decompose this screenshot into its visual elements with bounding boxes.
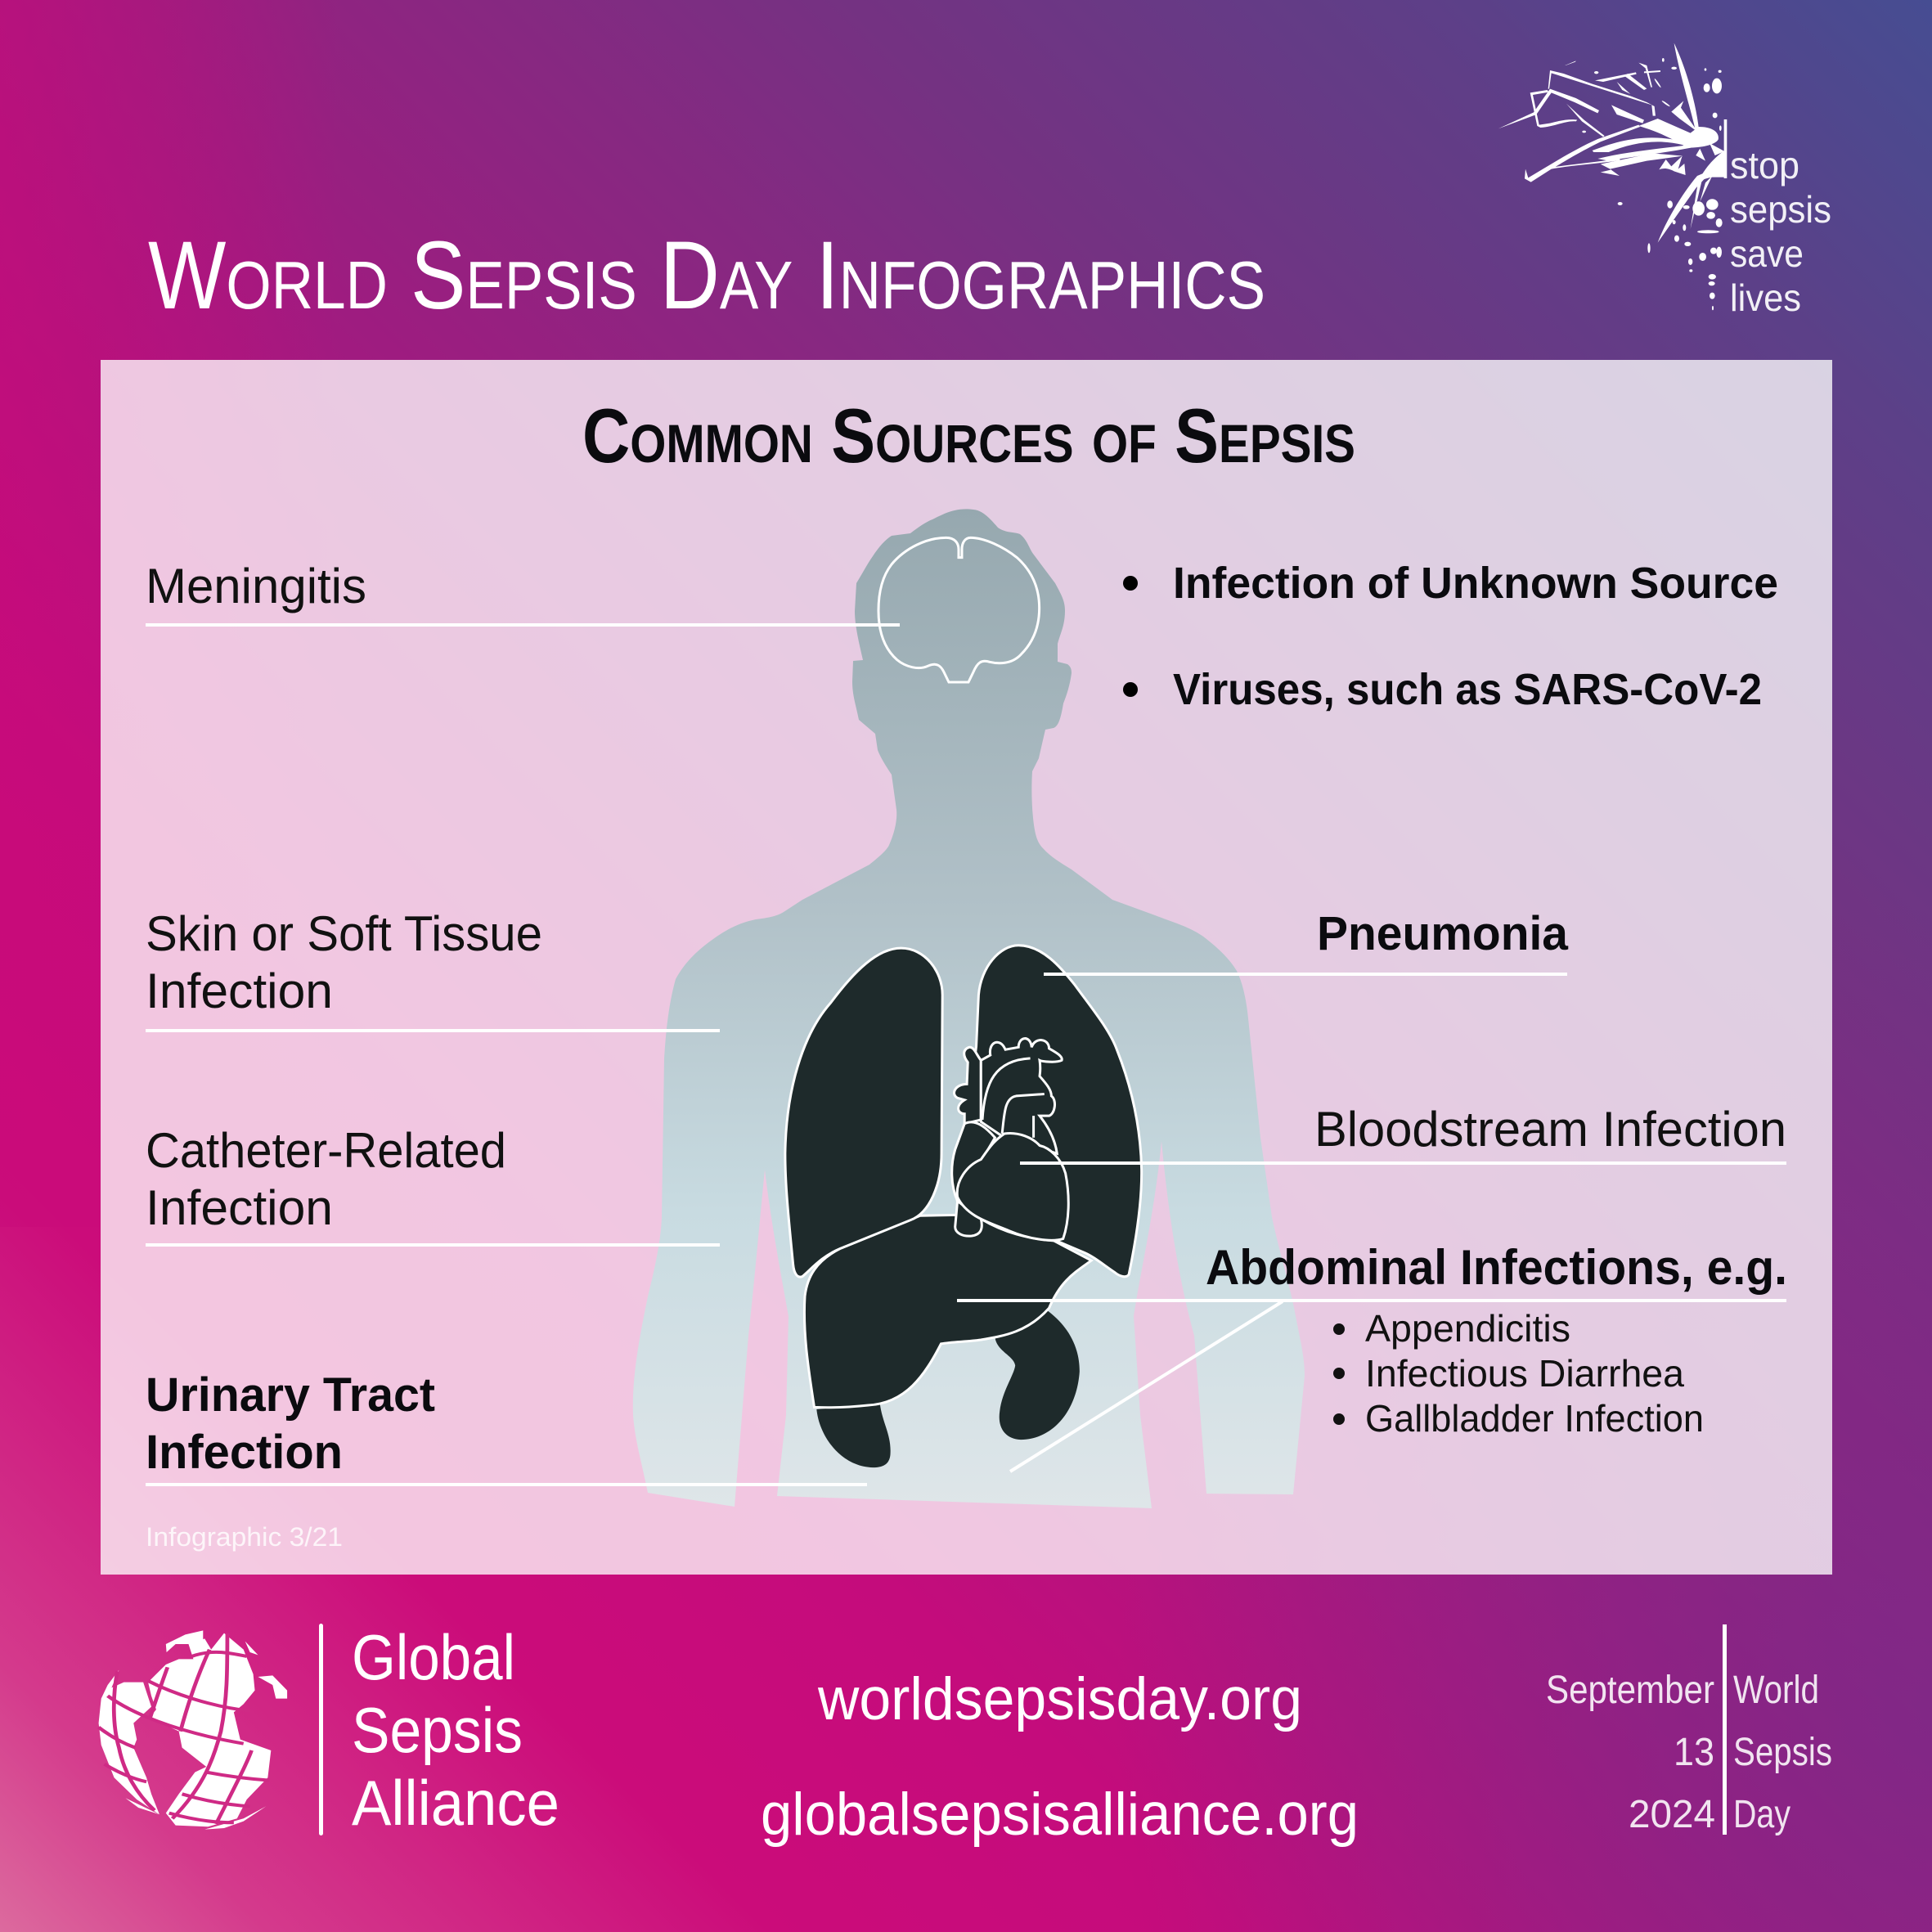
organ: right lung <box>785 948 942 1277</box>
human silhouette <box>633 509 1305 1508</box>
leader line: urinary <box>146 1483 867 1486</box>
logo text: Global <box>352 1621 515 1693</box>
organ: left lung <box>958 946 1142 1277</box>
logo text: Sepsis <box>352 1694 523 1766</box>
panel background <box>101 360 1832 1575</box>
panel heading: Common Sources of Sepsis <box>582 393 1355 479</box>
label: skin or soft tissue infection: Skin or Soft Tissue <box>146 906 542 961</box>
label: bloodstream infection: Bloodstream Infection <box>1314 1102 1786 1157</box>
leader line: bloodstream <box>1020 1161 1786 1165</box>
date block: 2024 <box>1629 1793 1715 1836</box>
website links <box>761 1666 1359 1848</box>
organs <box>785 946 1142 1467</box>
label: urinary tract infection: Urinary Tract <box>146 1368 435 1422</box>
organ: liver <box>804 1215 1091 1408</box>
label: urinary tract infection <box>146 1368 435 1479</box>
bullet <box>1123 576 1138 591</box>
list: abdominal examples: Infectious Diarrhea <box>1365 1352 1684 1395</box>
logo text: lives: lives <box>1730 276 1801 319</box>
leader line: catheter <box>146 1243 720 1247</box>
date block: September <box>1546 1669 1714 1712</box>
label: abdominal infections: Abdominal Infections, e.g. <box>1206 1240 1787 1295</box>
website links: worldsepsisday.org <box>817 1666 1302 1732</box>
organ: stomach <box>995 1310 1080 1440</box>
label: viruses: Viruses, such as SARS-CoV-2 <box>1173 665 1762 714</box>
label: urinary tract infection: Infection <box>146 1426 343 1479</box>
icon: brain outline <box>878 537 1040 682</box>
website links: globalsepsisalliance.org <box>761 1781 1359 1848</box>
list: abdominal examples: Gallbladder Infection <box>1365 1397 1704 1440</box>
label: pneumonia: Pneumonia <box>1317 907 1569 960</box>
icon: heart <box>952 1039 1068 1240</box>
icon: splatter <box>1498 43 1727 310</box>
leader line: pneumonia <box>1044 973 1567 976</box>
date block: World <box>1733 1669 1819 1712</box>
label: infection of unknown source: Infection of Unknown Source <box>1173 559 1778 608</box>
title: World Sepsis Day Infographics <box>148 222 1265 330</box>
label: catheter-related infection: Catheter-Related <box>146 1123 506 1178</box>
logo text: sepsis: sepsis <box>1730 188 1831 231</box>
label: catheter-related infection: Infection <box>146 1180 333 1235</box>
logo text: Alliance <box>352 1767 559 1839</box>
panel: common sources of sepsis <box>101 360 1832 1575</box>
bullet <box>1123 682 1138 697</box>
logo divider <box>319 1624 323 1835</box>
logo: stop sepsis save lives <box>1498 43 1831 319</box>
date block: 13 <box>1674 1731 1714 1774</box>
leader line: meningitis <box>146 623 900 627</box>
logo text: stop: stop <box>1730 144 1799 186</box>
footer logo: global sepsis alliance <box>99 1621 559 1839</box>
list: other sources <box>1123 559 1778 714</box>
label: skin or soft tissue infection: Infection <box>146 964 333 1018</box>
label: infographic number: Infographic 3/21 <box>146 1522 343 1552</box>
list: abdominal examples: Appendicitis <box>1365 1307 1570 1350</box>
label: catheter-related infection <box>146 1123 506 1235</box>
icon: globe <box>99 1630 287 1830</box>
date block <box>1546 1624 1832 1836</box>
date block: Day <box>1733 1793 1790 1836</box>
logo text <box>352 1621 559 1839</box>
leader line: abdominal <box>957 1299 1786 1302</box>
label: skin or soft tissue infection <box>146 906 542 1018</box>
logo text: save: save <box>1730 232 1804 275</box>
leader line: abdominal diagonal <box>1010 1301 1283 1471</box>
label: meningitis: Meningitis <box>146 559 366 613</box>
list: abdominal examples <box>1333 1307 1704 1440</box>
leader line: skin <box>146 1029 720 1032</box>
organ: intestine <box>816 1404 891 1467</box>
date block: Sepsis <box>1733 1731 1832 1774</box>
